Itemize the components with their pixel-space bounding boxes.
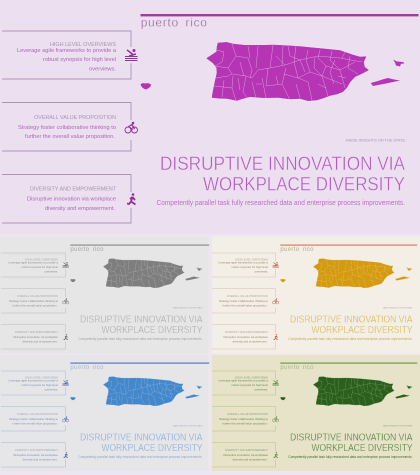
slide: blue variant	[0, 355, 209, 471]
map: Puerto Rico	[280, 377, 412, 406]
panel: high level overviews: robust synopsis for high level	[22, 265, 58, 269]
top rule	[140, 14, 418, 16]
panel: diversity and empowerment: diversity and empowerment.	[232, 457, 268, 461]
slide: beige variant	[212, 236, 420, 354]
panel: high level overviews: robust synopsis for high level	[232, 265, 268, 269]
panel: diversity and empowerment	[212, 443, 276, 467]
top rule	[280, 244, 417, 246]
title: WORKPLACE DIVERSITY	[102, 443, 203, 454]
title	[290, 432, 413, 454]
panel: overall value proposition	[1, 289, 66, 313]
panel: overall value proposition: further the overall value proposition.	[25, 134, 115, 140]
heading: puerto rico: puerto rico	[280, 365, 314, 371]
panel: overall value proposition	[2, 102, 131, 151]
panel: diversity and empowerment: Disruptive innovation via workplace	[224, 335, 268, 339]
subtitle: Competently parallel task fully researched data and enterprise process improvements.	[156, 200, 405, 207]
map: Puerto Rico	[280, 259, 412, 288]
title: DISRUPTIVE INNOVATION VIA	[80, 432, 203, 444]
icon: cyclist	[272, 298, 279, 304]
panel: overall value proposition	[212, 407, 276, 431]
panel: overall value proposition: OVERALL VALUE PROPOSITION	[227, 294, 268, 298]
panel: overall value proposition: further the overall value proposition.	[12, 422, 58, 426]
panel: overall value proposition: Strategy foster collaborative thinking to	[9, 299, 58, 303]
panel: high level overviews: Leverage agile frameworks to provide a	[218, 378, 268, 382]
panel: high level overviews: Leverage agile frameworks to provide a	[8, 378, 58, 382]
top rule	[70, 244, 209, 246]
panel: diversity and empowerment	[1, 443, 66, 467]
panel background	[0, 236, 208, 354]
panel: high level overviews	[1, 253, 66, 277]
slide: purple main	[0, 0, 420, 234]
icon: swimmer	[62, 262, 69, 268]
icon: swimmer	[125, 49, 138, 60]
panel: overall value proposition: OVERALL VALUE PROPOSITION	[17, 294, 58, 298]
panel: high level overviews	[212, 371, 276, 395]
icon: runner	[64, 452, 68, 458]
icon: runner	[127, 193, 136, 204]
panel: high level overviews: overviews.	[254, 388, 268, 392]
panel: diversity and empowerment	[212, 325, 276, 349]
panel background	[212, 236, 420, 354]
caption: RAISE INSIGHTS ON THE STATE	[173, 306, 203, 309]
heading: puerto rico: puerto rico	[141, 16, 208, 30]
top rule	[280, 362, 417, 364]
panel: diversity and empowerment: diversity and empowerment.	[22, 457, 58, 461]
panel: overall value proposition	[212, 289, 276, 313]
panel: overall value proposition: Strategy foster collaborative thinking to	[219, 299, 268, 303]
icon: runner	[64, 334, 68, 340]
subtitle: Competently parallel task fully researched data and enterprise process improvements.	[288, 455, 413, 459]
panel: high level overviews: HIGH LEVEL OVERVIEWS	[235, 258, 268, 262]
panel: diversity and empowerment: DIVERSITY AND EMPOWERMENT	[225, 448, 268, 452]
slide: gray variant	[0, 236, 209, 354]
panel: high level overviews: overviews.	[89, 66, 116, 72]
icon: cyclist	[62, 416, 69, 422]
icon: cyclist	[62, 298, 69, 304]
panel: diversity and empowerment: diversity and empowerment.	[22, 339, 58, 343]
panel: high level overviews: robust synopsis for high level	[232, 383, 268, 387]
panel: diversity and empowerment: DIVERSITY AND EMPOWERMENT	[225, 330, 268, 334]
title	[290, 314, 413, 336]
panel: overall value proposition: OVERALL VALUE PROPOSITION	[34, 115, 116, 121]
subtitle: Competently parallel task fully researched data and enterprise process improvements.	[78, 337, 203, 341]
panel: diversity and empowerment	[1, 325, 66, 349]
map: Puerto Rico	[70, 377, 202, 406]
icon: cyclist	[272, 416, 279, 422]
panel: overall value proposition: Strategy foster collaborative thinking to	[9, 417, 58, 421]
panel: diversity and empowerment	[2, 174, 131, 223]
icon: cyclist	[125, 122, 138, 133]
subtitle: Competently parallel task fully researched data and enterprise process improvements.	[288, 337, 413, 341]
title	[160, 153, 405, 196]
panel: diversity and empowerment: Disruptive innovation via workplace	[224, 453, 268, 457]
icon: swimmer	[62, 380, 69, 386]
icon: swimmer	[272, 262, 279, 268]
panel: diversity and empowerment: Disruptive innovation via workplace	[14, 335, 58, 339]
caption: RAISE INSIGHTS ON THE STATE	[383, 424, 413, 427]
panel: high level overviews: Leverage agile frameworks to provide a	[17, 48, 117, 54]
title: DISRUPTIVE INNOVATION VIA	[80, 314, 203, 326]
panel: high level overviews: overviews.	[44, 388, 58, 392]
icon: runner	[274, 334, 278, 340]
panel: high level overviews: overviews.	[44, 270, 58, 274]
heading: puerto rico: puerto rico	[280, 247, 314, 253]
panel: high level overviews	[2, 31, 131, 79]
panel: diversity and empowerment: Disruptive innovation via workplace	[14, 453, 58, 457]
caption: RAISE INSIGHTS ON THE STATE	[383, 306, 413, 309]
panel: high level overviews	[212, 253, 276, 277]
panel: diversity and empowerment: DIVERSITY AND EMPOWERMENT	[15, 330, 58, 334]
panel: high level overviews: HIGH LEVEL OVERVIEWS	[50, 42, 116, 48]
panel: high level overviews: overviews.	[254, 270, 268, 274]
panel: high level overviews	[1, 371, 66, 395]
icon: runner	[274, 452, 278, 458]
panel: high level overviews: robust synopsis for high level	[43, 57, 116, 63]
panel: overall value proposition: OVERALL VALUE PROPOSITION	[227, 412, 268, 416]
panel: overall value proposition: further the overall value proposition.	[222, 304, 268, 308]
panel background	[0, 0, 420, 234]
panel background	[212, 355, 420, 471]
panel: overall value proposition: Strategy foster collaborative thinking to	[18, 125, 116, 131]
panel background	[0, 355, 208, 471]
panel: high level overviews: HIGH LEVEL OVERVIEWS	[25, 258, 58, 262]
map: Puerto Rico	[70, 259, 202, 288]
title	[80, 314, 203, 336]
title	[80, 432, 203, 454]
panel: diversity and empowerment: DIVERSITY AND EMPOWERMENT	[30, 187, 117, 193]
panel: diversity and empowerment: diversity and empowerment.	[45, 206, 115, 212]
title: WORKPLACE DIVERSITY	[102, 325, 203, 336]
heading: puerto rico: puerto rico	[70, 247, 104, 253]
map: Puerto Rico	[140, 42, 404, 101]
panel: high level overviews: HIGH LEVEL OVERVIEWS	[235, 376, 268, 380]
caption: RAISE INSIGHTS ON THE STATE	[173, 424, 203, 427]
icon: swimmer	[272, 380, 279, 386]
panel: overall value proposition: Strategy foster collaborative thinking to	[219, 417, 268, 421]
panel: high level overviews: HIGH LEVEL OVERVIEWS	[25, 376, 58, 380]
caption: RAISE INSIGHTS ON THE STATE	[346, 138, 406, 142]
panel: high level overviews: Leverage agile frameworks to provide a	[218, 260, 268, 264]
panel: diversity and empowerment: DIVERSITY AND EMPOWERMENT	[15, 448, 58, 452]
panel: overall value proposition: OVERALL VALUE PROPOSITION	[17, 412, 58, 416]
subtitle: Competently parallel task fully researched data and enterprise process improvements.	[78, 455, 203, 459]
top rule	[70, 362, 209, 364]
heading: puerto rico: puerto rico	[70, 365, 104, 371]
panel: overall value proposition: further the overall value proposition.	[222, 422, 268, 426]
panel: high level overviews: Leverage agile frameworks to provide a	[8, 260, 58, 264]
panel: diversity and empowerment: diversity and empowerment.	[232, 339, 268, 343]
panel: overall value proposition: further the overall value proposition.	[12, 304, 58, 308]
slide: green variant	[212, 355, 420, 471]
panel: high level overviews: robust synopsis for high level	[22, 383, 58, 387]
panel: diversity and empowerment: Disruptive innovation via workplace	[27, 196, 116, 202]
panel: overall value proposition	[1, 407, 66, 431]
